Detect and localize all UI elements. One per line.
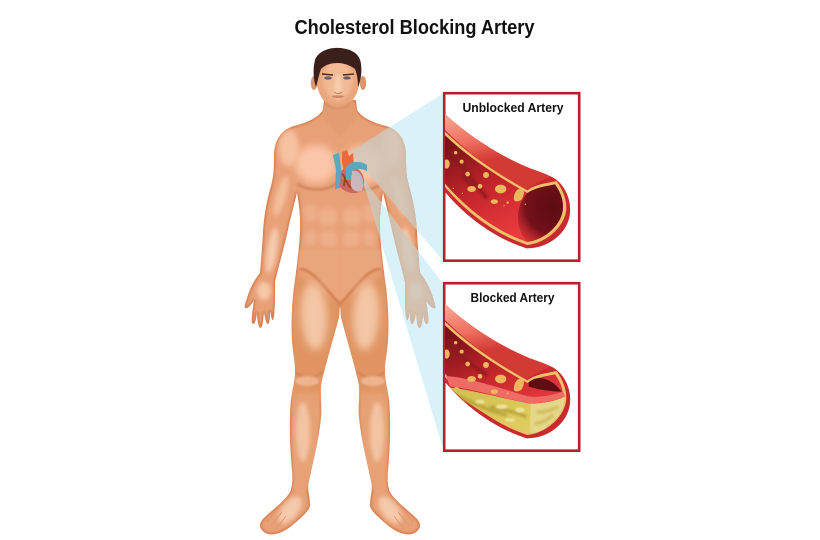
ears — [311, 76, 317, 90]
human figure — [245, 48, 435, 534]
overlay: upper wedge on body — [350, 127, 417, 230]
panel frame — [444, 93, 579, 261]
panel frame — [444, 283, 579, 451]
artery with plaque — [443, 302, 570, 438]
face — [317, 57, 360, 109]
hair — [314, 48, 361, 87]
panel: blocked artery — [443, 283, 579, 451]
body silhouette — [245, 100, 435, 534]
overlay: lower wedge on body — [364, 180, 436, 328]
heading: blocked artery: Blocked Artery — [470, 291, 555, 305]
wedge to unblocked panel — [350, 93, 444, 262]
wedge to blocked panel — [362, 177, 444, 452]
nose — [334, 92, 342, 94]
heading: unblocked artery: Unblocked Artery — [462, 101, 564, 115]
head — [311, 48, 366, 109]
artery cross-section — [443, 112, 570, 248]
title: Cholesterol Blocking Artery — [294, 17, 535, 39]
eyes — [324, 76, 332, 80]
icon: heart — [333, 150, 367, 193]
panel: unblocked artery — [443, 93, 579, 261]
neck — [323, 104, 357, 138]
mouth — [331, 95, 345, 98]
eyebrows — [322, 74, 354, 75]
grey overlay on body — [350, 127, 436, 328]
blue zoom wedges — [350, 93, 444, 452]
muscle shading — [245, 100, 435, 534]
